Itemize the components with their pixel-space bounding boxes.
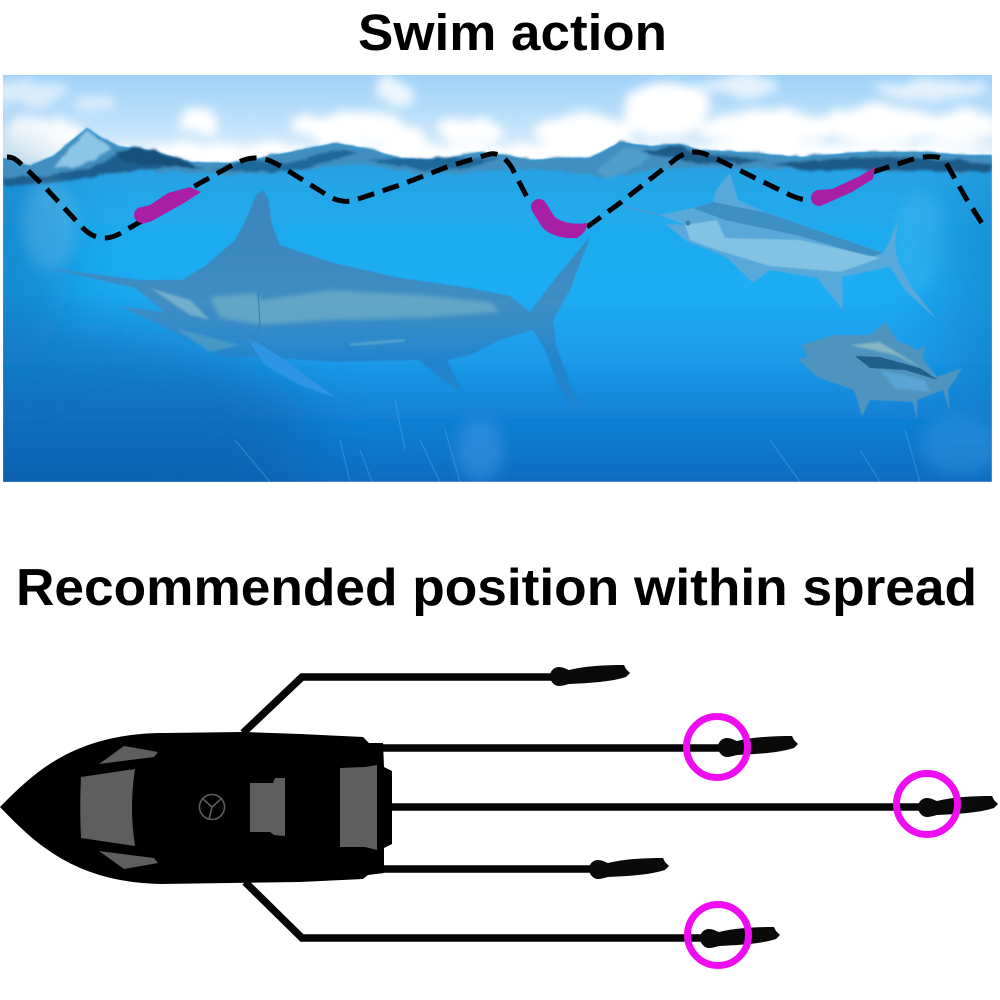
bubbles and seagrass texture: [22, 180, 1000, 482]
lure 3: [918, 796, 998, 817]
large blue marlin: [47, 190, 590, 410]
dashed swim path: [7, 152, 985, 238]
highlight circle: long center lure: [896, 774, 958, 834]
sky with clouds: [3, 75, 992, 152]
trolling lines: [243, 677, 925, 938]
highlight circle: upper mid lure: [686, 716, 748, 778]
striped marlin: [623, 173, 937, 320]
lure 4: [589, 858, 669, 879]
icon: helm wheel: [200, 794, 224, 820]
lure 2: [718, 736, 798, 757]
title: Recommended position within spread: Recommended position within spread: [16, 559, 977, 617]
highlight circle: lower lure: [688, 904, 748, 966]
tuna: [797, 322, 962, 420]
water depth shading: [3, 117, 992, 482]
swim path lure 2: [531, 199, 587, 238]
lure 5: [700, 927, 780, 948]
panel: underwater swim action scene: [3, 75, 992, 482]
water body: [3, 128, 992, 482]
title: Swim action: Swim action: [358, 4, 667, 61]
swim path lure 1: [134, 187, 201, 224]
boat windows and deck panels: [80, 746, 377, 869]
boat hull: [0, 732, 392, 884]
wave surface band: [3, 128, 992, 186]
panel: spread diagram: [0, 665, 998, 966]
swim path lure 3: [811, 167, 875, 206]
lure 1: [550, 665, 630, 686]
